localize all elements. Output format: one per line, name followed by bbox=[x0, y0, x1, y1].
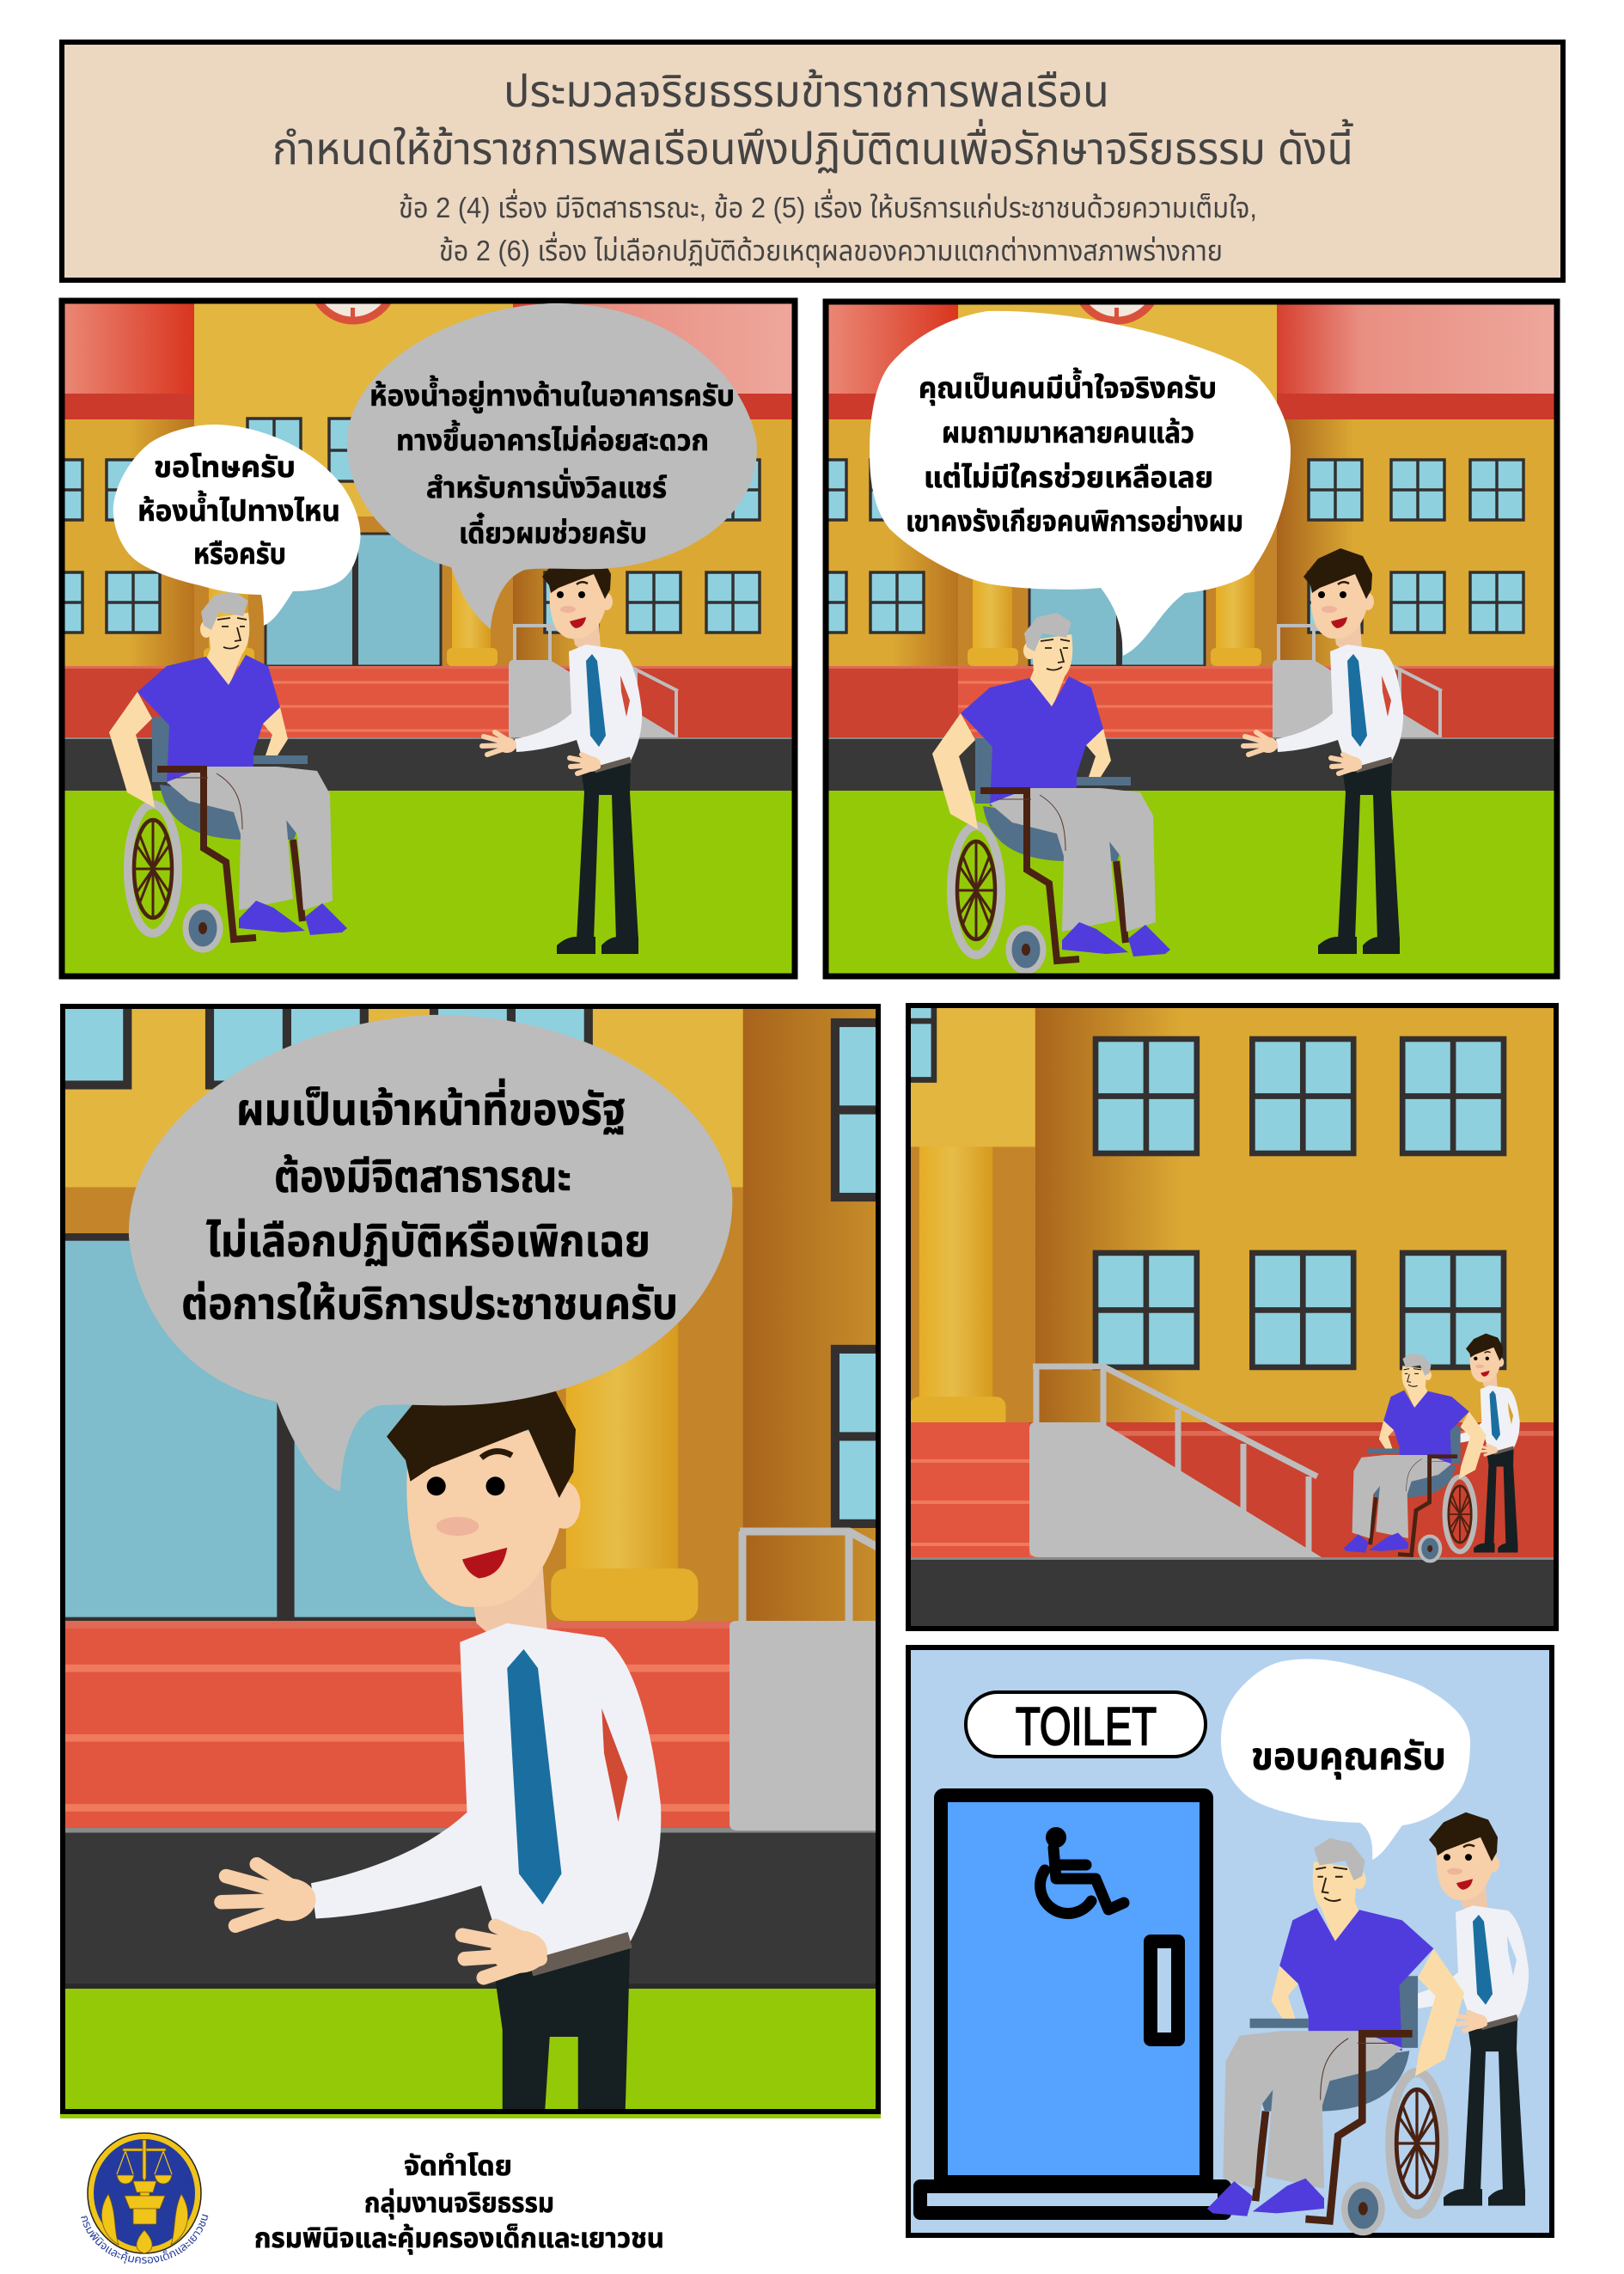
speech bubble: wheelchair user bbox=[870, 311, 1291, 656]
panel 4: going up the ramp bbox=[906, 1003, 1559, 1631]
toilet sign: TOILET bbox=[1016, 1697, 1157, 1757]
speech bubble: officer: ห้องน้ำอยู่ทางด้านในอาคารครับ bbox=[369, 375, 735, 413]
speech bubble: officer: เดี๋ยวผมช่วยครับ bbox=[459, 512, 647, 550]
speech bubble: officer: ทางขึ้นอาคารไม่ค่อยสะดวก bbox=[396, 419, 709, 457]
title line 1: ประมวลจริยธรรมข้าราชการพลเรือน bbox=[504, 67, 1109, 117]
toilet door bbox=[920, 1795, 1224, 2213]
speech bubble: wheelchair user: ผมถามมาหลายคนแล้ว bbox=[942, 417, 1194, 449]
panel 2: thanks for kindness bbox=[823, 299, 1560, 980]
speech bubble: thank you: ขอบคุณครับ bbox=[1251, 1736, 1446, 1780]
subtitle line 1: ข้อ 2 (4) เรื่อง มีจิตสาธารณะ, ข้อ 2 (5) เรื่อง ให้บริการแก่ประชาชนด้วยความเต็มใจ, bbox=[399, 188, 1257, 223]
speech bubble: wheelchair user: แต่ไม่มีใครช่วยเหลือเลย bbox=[924, 462, 1213, 494]
subtitle line 2: ข้อ 2 (6) เรื่อง ไม่เลือกปฏิบัติด้วยเหตุผลของความแตกต่างทางสภาพร่างกาย bbox=[439, 231, 1223, 268]
speech bubble: officer: ต้องมีจิตสาธารณะ bbox=[274, 1152, 571, 1202]
officer close-up bbox=[222, 1359, 661, 2110]
footer credits: กรมพินิจและคุ้มครองเด็กและเยาวชน bbox=[254, 2222, 664, 2254]
speech bubble: officer bbox=[347, 303, 757, 629]
speech bubble: wheelchair user bbox=[113, 425, 361, 626]
speech bubble: wheelchair user: ห้องน้ำไปทางไหน bbox=[137, 490, 340, 528]
speech bubble: officer: ผมเป็นเจ้าหน้าที่ของรัฐ bbox=[236, 1079, 626, 1135]
panel 5: at the accessible toilet bbox=[908, 1647, 1552, 2235]
speech bubble: thank you bbox=[1221, 1659, 1470, 1860]
speech bubble: wheelchair user: หรือครับ bbox=[193, 538, 286, 571]
footer credits bbox=[254, 2150, 664, 2254]
panel 1: asking for the toilet bbox=[58, 297, 797, 980]
ramp with handrail bbox=[1029, 1366, 1322, 1557]
speech bubble: wheelchair user: ขอโทษครับ bbox=[154, 451, 296, 484]
speech bubble: wheelchair user: คุณเป็นคนมีน้ำใจจริงครับ bbox=[919, 367, 1217, 406]
logo: department seal bbox=[81, 2132, 208, 2264]
icon: wheelchair symbol bbox=[1041, 1830, 1124, 1913]
panel 3: officer close-up bbox=[60, 1004, 1459, 2250]
speech bubble: officer: ไม่เลือกปฏิบัติหรือเพิกเฉย bbox=[206, 1217, 650, 1267]
title line 2: กำหนดให้ข้าราชการพลเรือนพึงปฏิบัติตนเพื่อรักษาจริยธรรม ดังนี้ bbox=[272, 119, 1353, 174]
footer credits: จัดทำโดย bbox=[404, 2150, 512, 2181]
ramp close-up bbox=[730, 1531, 877, 1831]
footer credits: กลุ่มงานจริยธรรม bbox=[364, 2187, 554, 2219]
seal caption: กรมพินิจและคุ้มครองเด็กและเยาวชน bbox=[81, 2214, 208, 2264]
speech bubble: officer: สำหรับการนั่งวิลแชร์ bbox=[426, 468, 667, 504]
header panel bbox=[62, 42, 1563, 280]
speech bubble: officer bbox=[129, 1015, 732, 1491]
door handle bbox=[1151, 1941, 1178, 2039]
speech bubble: officer: ต่อการให้บริการประชาชนครับ bbox=[181, 1280, 678, 1330]
speech bubble: wheelchair user: เขาคงรังเกียจคนพิการอย่างผม bbox=[906, 505, 1243, 538]
